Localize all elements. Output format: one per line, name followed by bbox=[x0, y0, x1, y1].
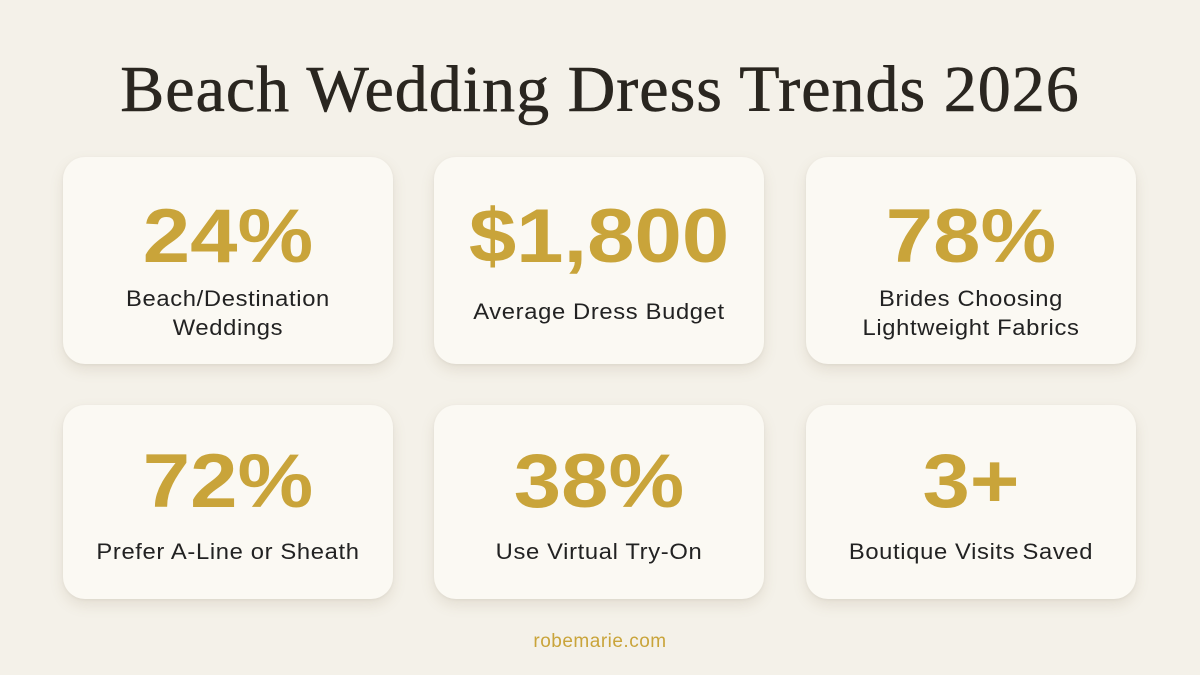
stat number: 38% bbox=[514, 439, 684, 524]
stat label: Prefer A-Line or Sheath bbox=[96, 539, 360, 564]
stat label: Use Virtual Try-On bbox=[496, 539, 702, 564]
stat number: 24% bbox=[143, 194, 313, 279]
footer: robemarie.com bbox=[533, 631, 667, 652]
stat number: 72% bbox=[143, 439, 313, 524]
stat number: 3+ bbox=[922, 439, 1020, 524]
card: boutique visits bbox=[806, 405, 1136, 599]
stat label: Lightweight Fabrics bbox=[862, 315, 1080, 340]
card: destination weddings bbox=[63, 157, 393, 364]
stat label: Beach/Destination bbox=[126, 286, 330, 311]
stat label: Brides Choosing bbox=[879, 286, 1063, 311]
stat label: Boutique Visits Saved bbox=[849, 539, 1093, 564]
title: Beach Wedding Dress Trends 2026 bbox=[120, 53, 1080, 126]
stat label: Average Dress Budget bbox=[473, 299, 725, 324]
stat label bbox=[862, 286, 1080, 340]
card: silhouette bbox=[63, 405, 393, 599]
stat label bbox=[126, 286, 330, 340]
card: budget bbox=[434, 157, 764, 364]
card: virtual try-on bbox=[434, 405, 764, 599]
stat number: $1,800 bbox=[469, 194, 729, 279]
stat number: 78% bbox=[886, 194, 1056, 279]
card: lightweight fabrics bbox=[806, 157, 1136, 364]
stat label: Weddings bbox=[173, 315, 283, 340]
